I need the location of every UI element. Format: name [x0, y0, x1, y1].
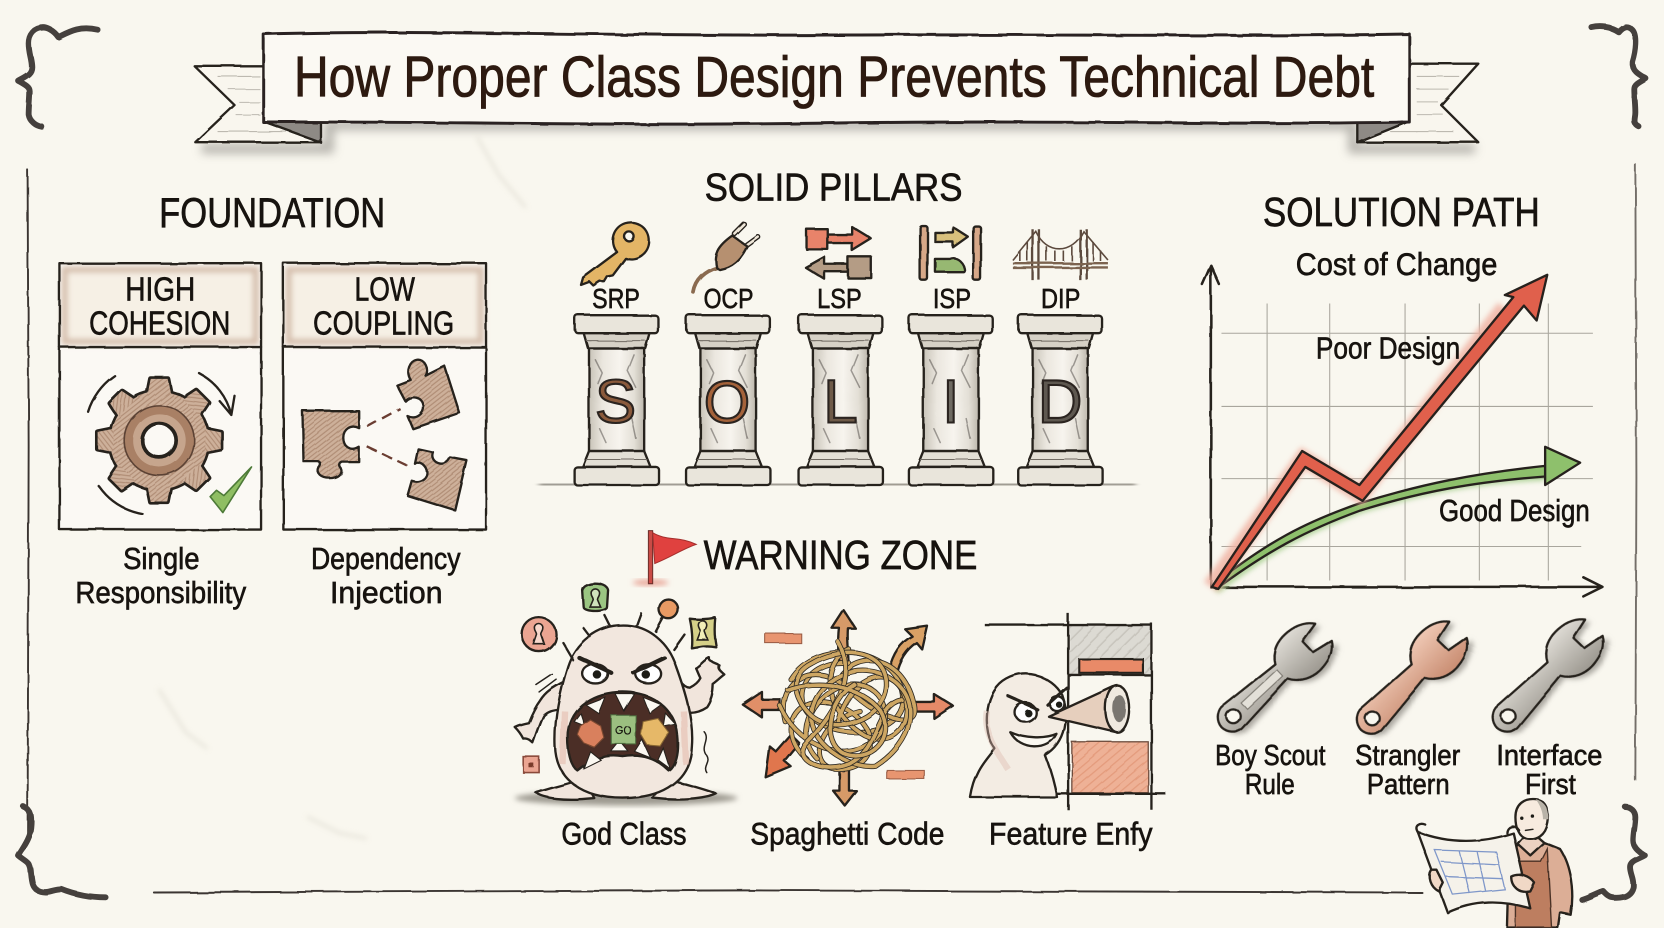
nosy character	[970, 674, 1066, 797]
illustration: feature envy	[970, 613, 1166, 810]
poor design line	[1211, 275, 1547, 589]
good design curve	[1212, 447, 1580, 590]
card: high cohesion: COHESION	[89, 304, 230, 341]
caption: single responsibility: Single	[123, 541, 200, 576]
label row: principle acronyms: LSP	[817, 283, 862, 314]
title banner	[194, 32, 1478, 149]
header text: HIGH	[125, 270, 195, 307]
telescope	[1048, 687, 1116, 732]
class blocks	[1070, 626, 1150, 675]
series label: poor design: Poor Design	[1316, 331, 1460, 366]
caption: spaghetti code: Spaghetti Code	[750, 816, 944, 852]
wrench: interface first	[1479, 609, 1617, 801]
floating icons	[522, 618, 556, 652]
caption: dependency injection	[311, 541, 461, 610]
label row: principle acronyms: DIP	[1041, 283, 1080, 314]
teeth	[574, 694, 675, 768]
caption: dependency injection: Dependency	[311, 541, 461, 576]
panel: solution path	[1202, 189, 1617, 801]
wrench: boy scout rule: Boy Scout	[1215, 740, 1325, 772]
shake lines	[536, 674, 708, 773]
icon: red flag	[632, 531, 696, 586]
icon: plug	[693, 224, 758, 292]
label row: principle acronyms: SRP	[592, 283, 640, 314]
panel: warning zone	[515, 531, 1166, 852]
torso and apron	[1507, 838, 1572, 928]
blueprint sheet	[1418, 832, 1530, 913]
label row: principle acronyms	[592, 283, 1080, 314]
heading: solution path: SOLUTION PATH	[1263, 189, 1540, 235]
panel: foundation	[59, 190, 486, 610]
arrows out of the tangle	[743, 610, 953, 805]
wrench: boy scout rule: Rule	[1245, 769, 1295, 801]
icon: swap arrows	[805, 227, 871, 279]
feet	[536, 778, 716, 800]
grid	[1221, 304, 1593, 580]
pillar I	[908, 315, 993, 485]
arms	[515, 658, 725, 743]
caption: feature envy: Feature Enfy	[989, 816, 1153, 852]
caption: single responsibility	[75, 541, 247, 610]
wrench: strangler pattern: Strangler	[1355, 740, 1461, 772]
pillar S	[574, 315, 659, 485]
background scratches	[159, 138, 525, 838]
page frame lines	[28, 164, 1636, 892]
label row: principle acronyms: OCP	[704, 283, 753, 314]
corner brace: bottom left	[18, 807, 106, 898]
left ribbon tail	[194, 66, 320, 142]
label row: principle acronyms: ISP	[933, 283, 971, 314]
antennae	[562, 613, 684, 660]
card: low coupling: COUPLING	[313, 304, 454, 341]
corner brace: bottom right	[1582, 807, 1645, 900]
wrench: boy scout rule	[1205, 613, 1346, 801]
pillar D	[1018, 315, 1103, 485]
heading: foundation: FOUNDATION	[159, 190, 385, 236]
chart title: Cost of Change	[1296, 246, 1497, 282]
pillar L: L	[823, 367, 858, 436]
icon: key	[580, 223, 649, 285]
corner brace: top right	[1592, 27, 1646, 126]
pillar S: S	[595, 367, 636, 436]
banner shadow	[202, 125, 1475, 149]
banner panel	[263, 32, 1409, 124]
series label: good design: Good Design	[1439, 493, 1590, 528]
wrench: strangler pattern	[1343, 611, 1481, 801]
pillar O: O	[704, 368, 750, 435]
icon: gear	[88, 374, 235, 514]
illustration: engineer reading blueprint	[1416, 799, 1572, 928]
illustration: god class monster	[515, 584, 738, 805]
pillar D: D	[1038, 367, 1082, 436]
class outline	[985, 613, 1166, 810]
header text: LOW	[354, 270, 415, 307]
wrench: strangler pattern: Pattern	[1367, 769, 1450, 801]
caption: single responsibility: Responsibility	[75, 575, 247, 610]
illustration: spaghetti code	[743, 610, 953, 805]
wrench: interface first: First	[1525, 769, 1576, 801]
panel: solid pillars	[539, 166, 1136, 485]
pillar I: I	[942, 367, 959, 436]
head	[1515, 799, 1548, 839]
card: low coupling	[283, 263, 486, 530]
heading: solid pillars: SOLID PILLARS	[705, 166, 963, 210]
body	[555, 625, 692, 798]
icon: interface segregation	[920, 226, 981, 280]
axes	[1202, 265, 1602, 596]
illustration: god class monster: GO	[616, 724, 631, 737]
mouth	[568, 692, 678, 770]
caption: god class: God Class	[561, 816, 687, 852]
noodle tangle	[780, 642, 914, 769]
hands	[1511, 875, 1535, 892]
right ribbon tail	[1357, 64, 1478, 142]
pillar O	[686, 315, 770, 485]
wrench: interface first: Interface	[1496, 740, 1602, 772]
ground shadow	[539, 484, 1136, 485]
icon: bridge	[1012, 229, 1108, 280]
corner brace: top left	[18, 28, 98, 126]
title text: How Proper Class Design Prevents Technical Debt	[294, 46, 1374, 110]
swallowed classes	[577, 720, 604, 747]
card: high cohesion	[59, 263, 261, 530]
heading: warning zone: WARNING ZONE	[704, 532, 977, 578]
chart: cost of change	[1202, 246, 1602, 596]
brows and eyes	[583, 664, 608, 683]
icon: green check	[210, 467, 252, 513]
icon: puzzle pieces	[302, 360, 467, 510]
caption: dependency injection: Injection	[330, 575, 443, 610]
pillar L	[798, 315, 883, 485]
